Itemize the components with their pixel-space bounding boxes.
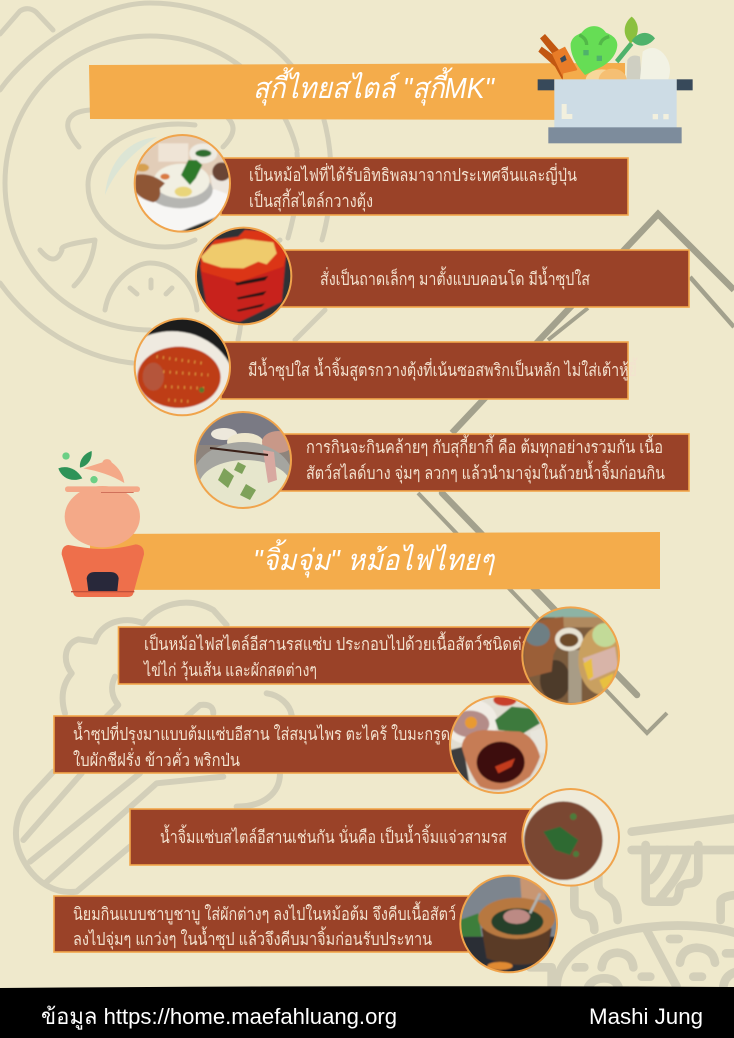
panel: item 8: ลงไปจุ่มๆ แกว่งๆ ในน้ำซุป แล้วจึงคีบมาจิ้มก่อนรับประทาน (73, 926, 432, 950)
panel: item 5 (118, 627, 545, 684)
heading: Jim Jum Thai hot pot: "จิ้มจุ่ม" หม้อไฟไทยๆ (253, 539, 495, 578)
background line art: cabbage (16, 603, 292, 892)
photo: stacked red trays (195, 227, 293, 327)
panel: item 2: สั่งเป็นถาดเล็กๆ มาตั้งแบบคอนโด มีน้ำซุปใส (320, 266, 590, 290)
author credit: Mashi Jung (589, 1004, 703, 1029)
panel: item 4 (280, 434, 689, 491)
panel: item 5: ไข่ไก่ วุ้นเส้น และผักสดต่างๆ (142, 660, 317, 681)
panel: item 6: ใบผักชีฝรั่ง ข้าวคั่ว พริกป่น (73, 748, 240, 770)
source credit: ข้อมูล https://home.maefahluang.org (41, 1004, 397, 1030)
heading: Thai style suki: สุกี้ไทยสไตล์ "สุกี้MK" (253, 67, 496, 106)
panel: item 7: น้ำจิ้มแซ่บสไตล์อีสานเช่นกัน นั่นคือ เป็นน้ำจิ้มแจ่วสามรส (160, 824, 507, 847)
panel: item 3: มีน้ำซุปใส น้ำจิ้มสูตรกวางตุ้งที่เน้นซอสพริกเป็นหลัก ไม่ใส่เต้าหู้ยี้ (248, 357, 638, 381)
photo: red dipping sauce (133, 318, 232, 418)
background line art: bottom right pot and chopsticks (530, 818, 734, 987)
photo: spicy Isan broth in clay pot (443, 694, 547, 793)
panel: item 1: เป็นหม้อไฟที่ได้รับอิทธิพลมาจากประเทศจีนและญี่ปุ่น (249, 163, 577, 186)
panel: item 8: นิยมกินแบบชาบูชาบู ใส่ผักต่างๆ ลงไปในหม้อต้ม จึงคีบเนื้อสัตว์ (73, 901, 456, 925)
panel: item 4: สัตว์สไลด์บาง จุ่มๆ ลวกๆ แล้วนำมาจุ่มในถ้วยน้ำจิ้มก่อนกิน (306, 460, 665, 484)
footer bar (0, 986, 734, 1038)
panel: item 8 (54, 896, 479, 952)
photo: Isan hot pot set (522, 607, 628, 705)
panel: item 1 (221, 158, 628, 215)
photo: suki pot with chopsticks (193, 412, 294, 514)
background zigzag lines (418, 214, 734, 733)
background line art: hot pot top view (0, 3, 331, 363)
panel: item 4: การกินจะกินคล้ายๆ กับสุกี้ยากี้ คือ ต้มทุกอย่างรวมกัน เนื้อ (306, 434, 663, 458)
panel: item 6 (54, 716, 464, 773)
panel: item 6: น้ำซุปที่ปรุงมาแบบต้มแซ่บอีสาน ใส่สมุนไพร ตะไคร้ ใบมะกรูด (73, 721, 450, 745)
photo: suki pot with hands (133, 133, 232, 235)
panel: item 1: เป็นสุกี้สไตล์กวางตุ้ง (249, 188, 373, 212)
heading: Thai style suki (89, 63, 625, 120)
panel: item 3 (221, 342, 638, 399)
heading: Jim Jum Thai hot pot (90, 532, 660, 590)
icon: clay pot on stove (58, 451, 144, 597)
photo: Isan jaew dipping sauce (522, 788, 620, 887)
icon: soup pot with vegetables (538, 17, 693, 143)
pale leaf decoration (105, 137, 157, 195)
panel: item 7 (130, 809, 535, 865)
panel: item 5: เป็นหม้อไฟสไตล์อีสานรสแซ่บ ประกอบไปด้วยเนื้อสัตว์ชนิดต่างๆ (144, 631, 545, 654)
panel: item 2 (280, 250, 689, 307)
photo: clay pot shabu with herbs (460, 875, 558, 973)
